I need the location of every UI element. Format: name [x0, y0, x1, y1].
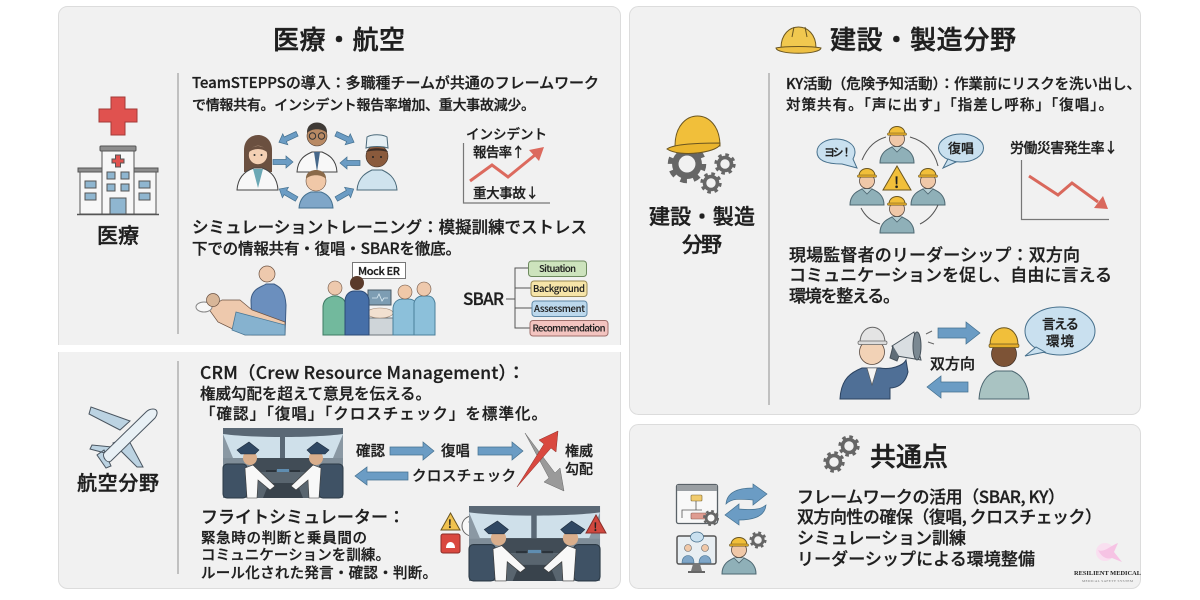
- text: site supervisor leadership: 環境を整える。: [789, 282, 900, 307]
- chart: occupational accident rate: 労働災害発生率↓: [1010, 138, 1118, 158]
- icon: gears: [825, 437, 858, 471]
- logo: Resilient Medical: MEDICAL SAFETY SYSTEM: [1082, 579, 1134, 583]
- text: site supervisor leadership: 現場監督者のリーダーシップ：双方向: [789, 241, 1080, 266]
- diagram: SBAR: SBAR: [463, 285, 504, 310]
- icon: video conference: [677, 532, 716, 573]
- text: CRM: CRM（Crew Resource Management）：: [200, 360, 525, 385]
- text: flight simulator: ルール化された発言・確認・判断。: [201, 562, 437, 583]
- illustration: mock ER team: Mock ER: [358, 263, 400, 279]
- box: Recommendation: Recommendation: [532, 320, 606, 334]
- label: aviation: 航空分野: [77, 467, 159, 496]
- text: common points list: [797, 483, 1102, 570]
- arrows: between team members: [273, 128, 360, 204]
- icon: hard hat with gears: [667, 116, 734, 192]
- diagram: SBAR: [463, 261, 608, 336]
- illustration: patient and clinician: [196, 266, 286, 335]
- chart: incident reporting rate: インシデント: [466, 123, 547, 143]
- chart: incident reporting rate: 重大事故↓: [473, 182, 539, 202]
- icon: red warning triangle: !: [594, 519, 597, 535]
- icon: warning triangle: !: [448, 516, 452, 532]
- divider: medical: [177, 73, 179, 334]
- illustration: mock ER team: [323, 262, 435, 335]
- icon: red cross: [99, 97, 137, 135]
- text: common points list: 双方向性の確保（復唱, クロスチェック）: [797, 503, 1102, 528]
- chart: incident reporting rate: 報告率↑: [473, 141, 525, 161]
- text: simulation training: 下での情報共有・復唱・SBARを徹底。: [192, 237, 461, 259]
- panel: medical and aviation: [58, 6, 621, 588]
- bubble: yoshi: [817, 139, 857, 168]
- box: Assessment: Assessment: [534, 301, 585, 315]
- icon: warning triangle: [441, 513, 460, 532]
- text: flight simulator: フライトシミュレーター：: [201, 503, 405, 528]
- text: CRM: 「確認」「復唱」「クロスチェック」を標準化。: [200, 402, 547, 424]
- diagram: two-way arrows: 双方向: [930, 353, 975, 374]
- person: male doctor: [297, 122, 337, 172]
- text: KY activity: 対策共有。「声に出す」「指差し呼称」「復唱」。: [786, 94, 1113, 115]
- icon: alarm: [441, 534, 460, 553]
- text: common points list: シミュレーション訓練: [797, 524, 966, 549]
- heading: common points: 共通点: [870, 437, 948, 474]
- text: KY activity: KY活動（危険予知活動）：作業前にリスクを洗い出し、: [786, 73, 1141, 94]
- person: female staff: [299, 170, 333, 208]
- bubble: readback: 復唱: [948, 138, 974, 157]
- icon: warning triangle: [883, 166, 911, 193]
- text: KY activity: [786, 73, 1141, 115]
- label: medical: 医療: [97, 220, 139, 250]
- text: simulation training: [192, 214, 587, 259]
- diagram: confirm and readback flow: [355, 440, 523, 486]
- illustration: flight simulator cockpit: [469, 506, 600, 581]
- text: flight simulator: [201, 503, 437, 583]
- diagram: authority gradient arrows: [517, 431, 593, 491]
- text: CRM: [200, 360, 547, 424]
- text: simulation training: シミュレーショントレーニング：模擬訓練でストレス: [192, 214, 587, 238]
- icon: worker with gear: [722, 533, 765, 574]
- heading: medical and aviation: 医療・航空: [273, 20, 405, 57]
- text: site supervisor leadership: [789, 241, 1112, 307]
- diagram: authority gradient arrows: 勾配: [565, 459, 593, 479]
- person: nurse: [357, 135, 397, 190]
- illustration: KY team circle: [817, 126, 984, 233]
- icon: question bubble: ?: [468, 516, 474, 535]
- illustration: cockpit crew: [223, 428, 343, 498]
- illustration: team communication: [237, 122, 397, 208]
- divider: construction: [768, 73, 770, 405]
- arrows: circular flow: [861, 137, 938, 224]
- label: construction and manufacturing: [649, 201, 755, 259]
- text: site supervisor leadership: コミュニケーションを促し、自由に言える: [789, 261, 1112, 286]
- icon: workflow window: [676, 484, 718, 525]
- box: Situation: Situation: [539, 261, 576, 275]
- icon: hospital building: [77, 146, 159, 214]
- icon: exchange arrows: [725, 484, 767, 525]
- bubble: environment to speak freely: 言える: [1042, 313, 1079, 333]
- label: construction and manufacturing: 建設・製造: [649, 201, 755, 231]
- heading: construction and manufacturing: 建設・製造分野: [830, 20, 1016, 57]
- text: TeamSTEPPS: [192, 72, 599, 115]
- box: Situation: [528, 261, 586, 276]
- chart: occupational accident rate: [1010, 138, 1118, 220]
- chart: incident reporting rate: [464, 123, 550, 203]
- illustration: supervisor with megaphone: [840, 327, 934, 399]
- diagram: authority gradient arrows: 権威: [565, 441, 593, 461]
- panel: construction and manufacturing: [630, 6, 1141, 414]
- logo: Resilient Medical: [1074, 543, 1142, 583]
- diagram: two-way arrows: [927, 322, 980, 398]
- text: TeamSTEPPS: TeamSTEPPSの導入：多職種チームが共通のフレームワーク: [192, 72, 599, 93]
- icon: airplane: [89, 407, 157, 468]
- diagram: confirm and readback flow: クロスチェック: [412, 465, 516, 486]
- bubble: readback: [938, 134, 984, 168]
- text: common points list: フレームワークの活用（SBAR, KY）: [797, 483, 1065, 508]
- person: female doctor: [237, 135, 278, 190]
- label: construction and manufacturing: 分野: [682, 229, 722, 259]
- text: TeamSTEPPS: で情報共有。インシデント報告率増加、重大事故減少。: [192, 95, 535, 115]
- illustration: worker: [979, 328, 1029, 399]
- bubble: environment to speak freely: [1025, 307, 1095, 356]
- icon: warning triangle: !: [894, 172, 899, 193]
- bubble: environment to speak freely: 環境: [1046, 330, 1074, 350]
- icon: red warning triangle: [586, 515, 606, 535]
- text: common points list: リーダーシップによる環境整備: [797, 545, 1035, 570]
- icon: question bubble: [462, 516, 482, 536]
- box: Background: Background: [533, 281, 585, 295]
- text: flight simulator: 緊急時の判断と乗員間の: [201, 527, 367, 548]
- divider: aviation: [177, 361, 179, 574]
- diagram: confirm and readback flow: 確認: [356, 440, 386, 461]
- text: CRM: 権威勾配を超えて意見を伝える。: [200, 382, 431, 404]
- panel: common points: [630, 424, 1142, 588]
- bubble: yoshi: ヨシ！: [824, 144, 852, 160]
- icon: title hard hat: [776, 27, 821, 53]
- text: flight simulator: コミュニケーションを訓練。: [201, 544, 390, 565]
- diagram: confirm and readback flow: 復唱: [441, 440, 470, 461]
- logo: Resilient Medical: RESILIENT MEDICAL: [1074, 570, 1142, 577]
